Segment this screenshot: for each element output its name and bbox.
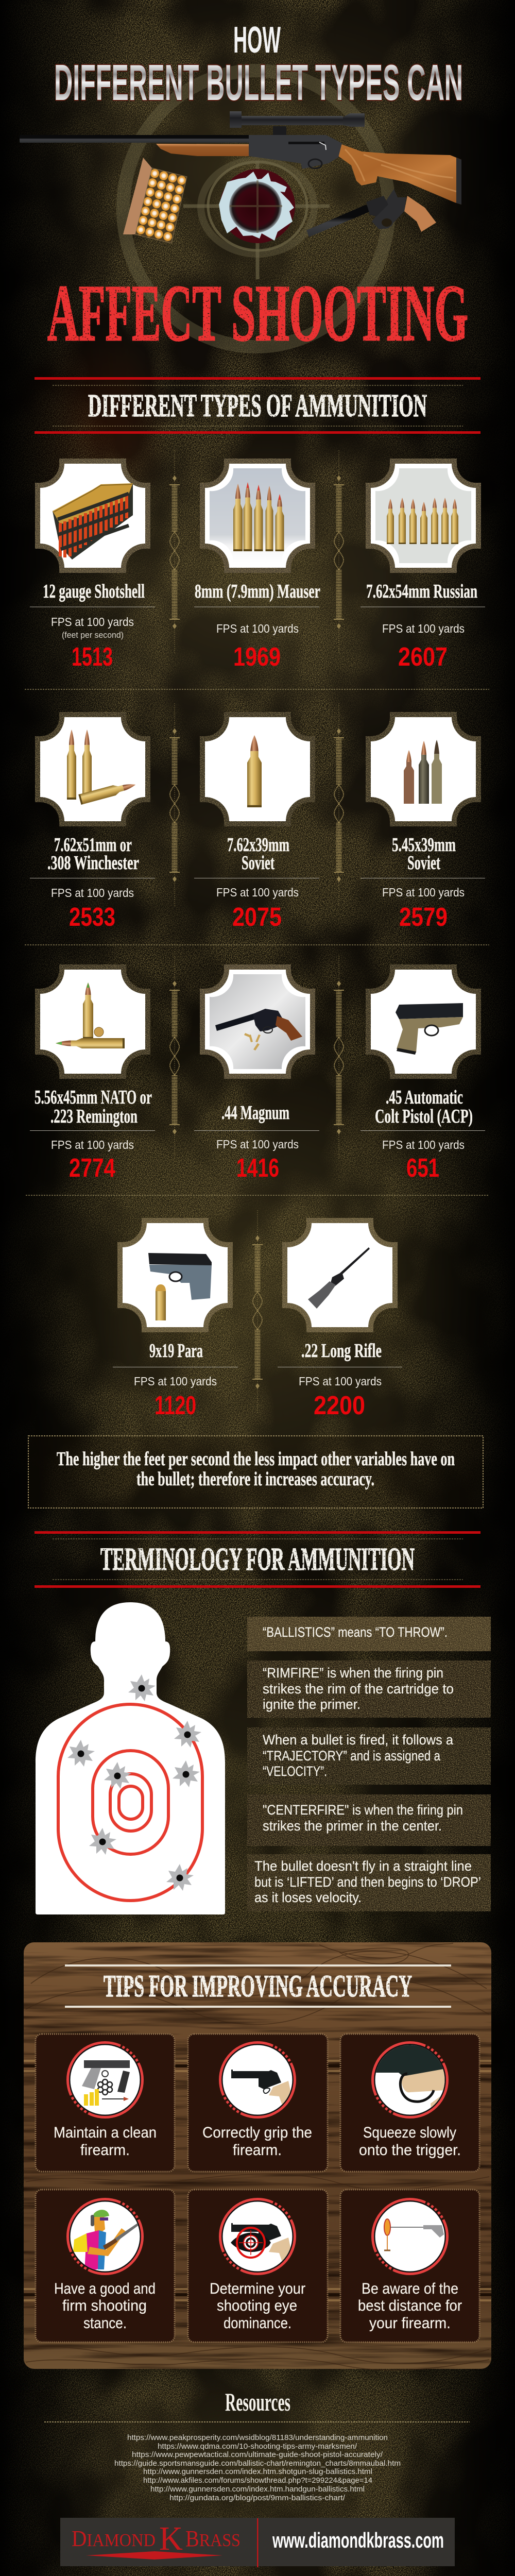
fps label: FPS at 100 yards bbox=[216, 622, 299, 635]
section heading: different types of ammunition bbox=[35, 377, 480, 434]
icon: finger on trigger bbox=[373, 2042, 447, 2117]
bullet holes bbox=[67, 1674, 201, 1891]
column separators bbox=[169, 450, 344, 1414]
callout: feet per second note bbox=[28, 1436, 483, 1508]
fps label: FPS at 100 yards bbox=[51, 615, 134, 629]
tip: best distance: your firearm. bbox=[369, 2315, 451, 2332]
value: 2774 bbox=[69, 1153, 115, 1182]
value: 651 bbox=[406, 1153, 439, 1182]
panel: bullet drop: The bullet doesn't fly in a straight line bbox=[254, 1858, 472, 1874]
tip: best distance: best distance for bbox=[358, 2297, 462, 2314]
tip: good and firm shooting stance: firm shooting bbox=[62, 2297, 147, 2314]
panel: ballistics bbox=[247, 1617, 491, 1651]
label: .45 Automatic bbox=[386, 1087, 463, 1108]
image frame bbox=[35, 712, 150, 826]
label: .308 Winchester bbox=[47, 852, 139, 874]
icon: revolver in hand bbox=[220, 2042, 295, 2117]
card: 7.62x39mm soviet bbox=[194, 712, 319, 931]
image frame bbox=[200, 712, 315, 826]
resources list: http://www.akfiles.com/forums/showthread.php?t=299224&page=14 bbox=[143, 2476, 372, 2485]
resources list: http://gundata.org/blog/post/9mm-ballistics-chart/ bbox=[169, 2494, 346, 2502]
value: 1120 bbox=[154, 1391, 196, 1420]
label: 12 gauge Shotshell bbox=[43, 581, 145, 602]
image frame bbox=[35, 964, 150, 1079]
photo: shotshell crate bbox=[40, 464, 145, 568]
panel: trajectory bbox=[247, 1727, 491, 1785]
card: .22 long rifle bbox=[278, 1218, 402, 1420]
photo: single cartridge bbox=[205, 717, 310, 821]
label bbox=[47, 834, 139, 874]
value: 2200 bbox=[314, 1391, 365, 1420]
panel: rimfire: ignite the primer. bbox=[263, 1697, 360, 1712]
value: 2579 bbox=[399, 902, 448, 931]
label: 7.62x39mm bbox=[227, 834, 289, 856]
tip: best distance bbox=[340, 2190, 479, 2342]
unit note: (feet per second) bbox=[62, 630, 124, 640]
value: 2607 bbox=[398, 642, 448, 671]
scoring rings bbox=[58, 1704, 202, 1901]
icon: eye target and revolver bbox=[220, 2199, 295, 2274]
divider bbox=[30, 1130, 155, 1131]
tip: squeeze slowly onto the trigger bbox=[340, 2034, 479, 2172]
photo: seven cartridges bbox=[371, 464, 476, 568]
photo: two cartridges bbox=[40, 970, 145, 1074]
tip: eye dominance: shooting eye bbox=[217, 2297, 297, 2314]
caption: Have a good and bbox=[54, 2280, 156, 2297]
panel: bullet drop bbox=[247, 1854, 491, 1911]
hero target rings bbox=[123, 71, 389, 347]
divider bbox=[360, 1130, 485, 1131]
card: 5.56x45mm nato bbox=[30, 964, 155, 1182]
label: 9x19 Para bbox=[149, 1340, 203, 1362]
caption: Correctly grip the bbox=[202, 2124, 312, 2141]
panel: bullet drop: as it loses velocity. bbox=[254, 1890, 362, 1905]
tip: good and firm shooting stance bbox=[36, 2190, 175, 2342]
resources list bbox=[114, 2433, 401, 2502]
photo: five cartridges bbox=[205, 464, 310, 568]
label: .223 Remington bbox=[50, 1106, 138, 1127]
label bbox=[392, 834, 456, 874]
panel: tips wood board bbox=[24, 1942, 491, 2370]
caption: Determine your bbox=[210, 2280, 305, 2297]
fps label: FPS at 100 yards bbox=[382, 1138, 465, 1151]
icon: scoped rifle bbox=[20, 111, 461, 205]
photo: grey pistol and cartridge bbox=[123, 1223, 228, 1327]
icon: shooter bbox=[68, 2199, 142, 2274]
tip: maintain a clean firearm: firearm. bbox=[80, 2142, 130, 2159]
label: Soviet bbox=[407, 852, 440, 874]
icon: revolver bbox=[306, 189, 436, 237]
value: 2075 bbox=[232, 902, 282, 931]
icon: bullet hole bbox=[219, 169, 295, 243]
logo: diamond k brass: DIAMOND bbox=[72, 2526, 156, 2551]
label: .44 Magnum bbox=[221, 1102, 289, 1124]
image frame bbox=[366, 459, 481, 573]
tip: eye dominance bbox=[188, 2190, 328, 2342]
fps label: FPS at 100 yards bbox=[382, 622, 465, 635]
photo: tan pistol bbox=[371, 970, 476, 1074]
image frame bbox=[35, 459, 150, 573]
tips heading bbox=[65, 1964, 451, 2008]
card: 12 gauge shotshell bbox=[30, 459, 155, 671]
icon: disassembled firearm bbox=[68, 2042, 142, 2117]
card: 5.45x39mm soviet bbox=[360, 712, 485, 931]
fps label: FPS at 100 yards bbox=[382, 886, 465, 899]
icon: ammo box bbox=[123, 158, 187, 243]
footer logo bar bbox=[60, 2518, 455, 2567]
label: 5.45x39mm bbox=[392, 834, 456, 856]
logo: diamond k brass bbox=[72, 2520, 241, 2560]
panel: rimfire: strikes the rim of the cartridge to bbox=[263, 1681, 454, 1697]
target silhouette bbox=[36, 1602, 225, 1914]
label: Soviet bbox=[242, 852, 274, 874]
section heading: terminology for ammunition bbox=[35, 1531, 480, 1588]
image frame bbox=[282, 1218, 398, 1332]
resources list: http://www.gunnersden.com/index.htm.shotgun-slug-ballistics.html bbox=[143, 2467, 372, 2476]
label bbox=[375, 1087, 473, 1127]
caption: Squeeze slowly bbox=[363, 2124, 456, 2141]
value: 1513 bbox=[72, 642, 113, 671]
fps label: FPS at 100 yards bbox=[216, 1138, 299, 1151]
card: .45 acp bbox=[360, 964, 485, 1182]
image frame bbox=[366, 712, 481, 826]
value: 1416 bbox=[236, 1153, 279, 1182]
photo: revolver on grey bbox=[205, 970, 310, 1074]
panel: trajectory: When a bullet is fired, it follows a bbox=[263, 1732, 454, 1748]
panel: trajectory: “VELOCITY”. bbox=[263, 1764, 327, 1779]
caption: Be aware of the bbox=[362, 2280, 458, 2297]
label bbox=[227, 834, 289, 874]
label: .22 Long Rifle bbox=[301, 1340, 382, 1362]
resources list: https://www.qdma.com/10-shooting-tips-army-marksmen/ bbox=[158, 2442, 357, 2451]
card: 9x19 para bbox=[113, 1218, 238, 1420]
panel: rimfire: “RIMFIRE” is when the firing pin bbox=[263, 1665, 443, 1681]
value: 2533 bbox=[69, 902, 115, 931]
image frame bbox=[366, 964, 481, 1079]
resources list: http://www.gunnersden.com/index.htm.handgun-ballistics.html bbox=[150, 2485, 365, 2494]
tip: eye dominance: dominance. bbox=[224, 2315, 291, 2332]
card: 8mm mauser bbox=[194, 459, 320, 671]
label bbox=[35, 1087, 152, 1127]
logo: diamond k brass: K bbox=[159, 2520, 183, 2557]
tip: squeeze slowly onto the trigger: onto the trigger. bbox=[359, 2142, 461, 2159]
image frame bbox=[117, 1218, 233, 1332]
row dividers bbox=[25, 689, 489, 1195]
card: .44 magnum bbox=[194, 964, 319, 1182]
tip: correctly grip the firearm: firearm. bbox=[233, 2142, 282, 2159]
resources heading: Resources bbox=[225, 2387, 290, 2416]
image frame bbox=[200, 964, 315, 1079]
value: 1969 bbox=[233, 642, 281, 671]
panel: centerfire: strikes the primer in the center. bbox=[263, 1818, 442, 1834]
panel: ballistics: “BALLISTICS” means “TO THROW”. bbox=[263, 1624, 448, 1640]
resources list: https://www.peakprosperity.com/wsidblog/81183/understanding-ammunition bbox=[127, 2433, 388, 2442]
card: 7.62x51mm bbox=[30, 712, 155, 931]
fps label: FPS at 100 yards bbox=[134, 1375, 217, 1388]
panel: bullet drop: but is ‘LIFTED’ and then begins to ‘DROP’ bbox=[254, 1874, 481, 1890]
resources list: https://guide.sportsmansguide.com/ballistic-chart/remington_charts/8mmaubal.htm bbox=[114, 2459, 401, 2468]
resources list: https://www.pewpewtactical.com/ultimate-guide-shoot-pistol-accurately/ bbox=[132, 2450, 383, 2459]
callout: feet per second note: the bullet; therefore it increases accuracy. bbox=[136, 1468, 374, 1490]
photo: rifle bbox=[287, 1223, 392, 1327]
tip: maintain a clean firearm bbox=[36, 2034, 175, 2172]
fps label: FPS at 100 yards bbox=[299, 1375, 382, 1388]
tip: correctly grip the firearm bbox=[188, 2034, 328, 2172]
photo: three cartridges bbox=[40, 717, 145, 821]
photo: three cartridges bbox=[371, 717, 476, 821]
fps label: FPS at 100 yards bbox=[216, 886, 299, 899]
icon: target and distance line bbox=[373, 2199, 447, 2274]
plank seams bbox=[24, 2066, 491, 2295]
card: 7.62x54mm russian bbox=[360, 459, 485, 671]
panel: centerfire bbox=[247, 1794, 491, 1846]
divider bbox=[194, 1130, 319, 1131]
image frame bbox=[200, 459, 315, 573]
panel: rimfire bbox=[247, 1660, 491, 1718]
caption: Maintain a clean bbox=[54, 2124, 157, 2141]
tip: good and firm shooting stance: stance. bbox=[83, 2315, 127, 2332]
fps label: FPS at 100 yards bbox=[51, 1138, 134, 1151]
label: 8mm (7.9mm) Mauser bbox=[195, 581, 320, 602]
title: how: HOW bbox=[233, 20, 281, 61]
logo: diamond k brass: BRASS bbox=[185, 2526, 241, 2551]
label: 5.56x45mm NATO or bbox=[35, 1087, 152, 1108]
panel: centerfire: "CENTERFIRE" is when the firing pin bbox=[263, 1802, 463, 1818]
label: 7.62x51mm or bbox=[54, 834, 132, 856]
fps label: FPS at 100 yards bbox=[51, 886, 134, 900]
panel: trajectory: “TRAJECTORY” and is assigned a bbox=[263, 1748, 441, 1764]
